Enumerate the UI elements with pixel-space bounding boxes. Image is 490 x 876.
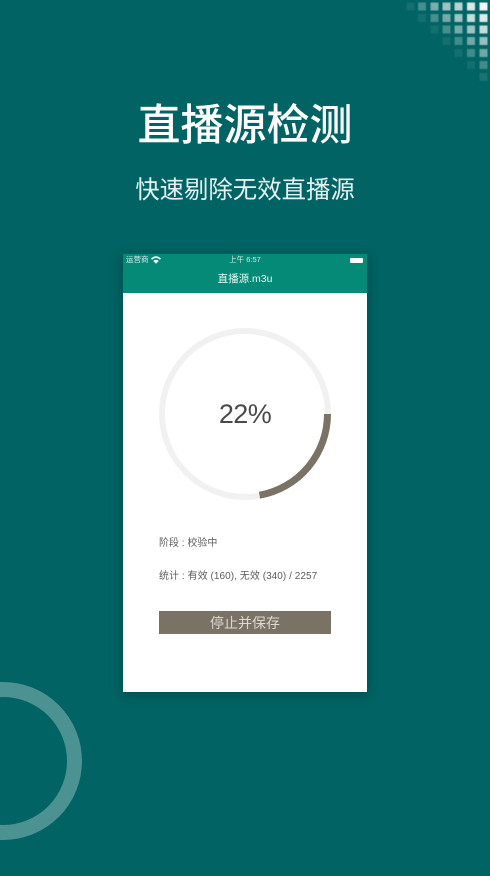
- stage text: 阶段 : 校验中: [159, 538, 217, 549]
- stop and save button: 停止并保存: [210, 615, 280, 631]
- app header bar: [123, 254, 367, 293]
- progress ring: [159, 328, 331, 500]
- panel: phone screenshot: [123, 254, 367, 692]
- icon: wifi: [151, 256, 161, 264]
- screen title: 直播源.m3u: [218, 273, 272, 285]
- progress percentage: 22%: [219, 399, 271, 429]
- status bar time: 上午 6:57: [229, 255, 261, 264]
- subtitle: 快速剔除无效直播源: [135, 177, 355, 204]
- statistics text: 统计 : 有效 (160), 无效 (340) / 2257: [159, 571, 317, 582]
- title: 直播源检测: [138, 102, 352, 150]
- stop and save button: [159, 611, 331, 634]
- status bar carrier: 运营商: [126, 255, 148, 264]
- icon: battery: [350, 258, 363, 263]
